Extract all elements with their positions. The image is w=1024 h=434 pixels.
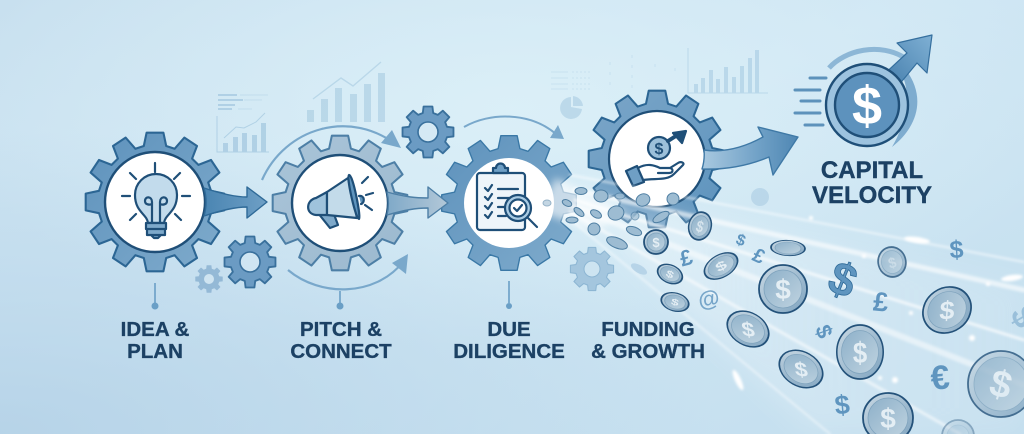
- large coins with dollar signs: $: [880, 403, 896, 434]
- label: pitch and connect: CONNECT: [290, 340, 392, 363]
- large coins with dollar signs: $: [985, 362, 1016, 408]
- gear: pitch and connect: [273, 136, 407, 270]
- large coins with dollar signs: $: [939, 295, 956, 325]
- gear: idea and plan: [86, 133, 224, 271]
- large coins with dollar signs: $: [713, 257, 730, 275]
- small flying coins: [543, 188, 679, 277]
- capital velocity icon: $: [852, 76, 882, 136]
- speed lines: [795, 78, 826, 125]
- connector: idea: [152, 283, 158, 310]
- floating currency symbols: $: [733, 231, 748, 250]
- arrow from funding gear: [702, 127, 798, 175]
- large coins with dollar signs: $: [793, 357, 809, 382]
- gear: due diligence: [442, 136, 576, 270]
- heading: capital velocity: VELOCITY: [812, 182, 932, 209]
- faded gear near funding: [570, 247, 614, 291]
- small gear upper: [403, 107, 453, 157]
- icon: clipboard with magnifier: [477, 164, 537, 230]
- floating currency symbols: @: [696, 284, 721, 313]
- floating currency symbols: €: [929, 358, 951, 398]
- floating currency symbols: £: [749, 244, 768, 269]
- label: idea and plan: PLAN: [127, 340, 183, 363]
- faint chart: small bars with list: [217, 95, 269, 152]
- arrow from pitch gear: [387, 187, 448, 218]
- heading: capital velocity: CAPITAL: [821, 157, 923, 184]
- large coins with dollar signs: $: [775, 274, 791, 305]
- label: due diligence: DILIGENCE: [453, 340, 565, 363]
- floating currency symbols: $: [833, 389, 851, 421]
- arc arrow over diligence gear: [464, 117, 564, 139]
- arrow from idea gear: [204, 187, 267, 218]
- floating currency symbols: $: [810, 321, 838, 341]
- large coins with dollar signs: $: [694, 218, 705, 237]
- large coins with dollar signs: $: [740, 317, 756, 342]
- arc arrow under pitch gear: [288, 254, 408, 289]
- floating currency symbols: $: [821, 250, 865, 308]
- label: funding and growth: FUNDING: [601, 318, 695, 341]
- small gear lower: [225, 237, 275, 287]
- floating currency symbols: $: [949, 236, 964, 264]
- capital velocity icon: [795, 35, 932, 147]
- large coins with dollar signs: $: [664, 268, 676, 281]
- large coins with dollar signs: $: [853, 336, 868, 369]
- label: due diligence: DUE: [487, 318, 531, 341]
- icon: hand holding coin: $: [655, 141, 664, 158]
- large coins with dollar signs: $: [887, 255, 898, 273]
- orbit arcs: [829, 49, 905, 68]
- label: funding and growth: & GROWTH: [591, 340, 705, 363]
- label: idea and plan: IDEA &: [121, 318, 190, 341]
- faint chart: rising bars: [307, 62, 385, 122]
- faint chart: right bars and table: [551, 48, 768, 119]
- floating currency symbols: £: [872, 286, 890, 318]
- dollar coin: [826, 64, 908, 146]
- connector: diligence: [506, 281, 512, 309]
- gear: funding and growth: [589, 91, 725, 227]
- floating currency symbols: £: [677, 244, 696, 271]
- arc arrow over pitch gear: [262, 126, 401, 180]
- rising arrow: [880, 35, 932, 92]
- connector: pitch: [336, 291, 344, 310]
- large coins with dollar signs: $: [670, 297, 680, 308]
- icon: megaphone: [308, 175, 373, 228]
- label: pitch and connect: PITCH &: [300, 318, 382, 341]
- faded gear small: [195, 265, 223, 293]
- light beam from gears to coins: [540, 175, 1024, 434]
- large coins with dollar signs: $: [652, 235, 660, 250]
- icon: light bulb: [122, 163, 190, 238]
- floating currency symbols: [677, 188, 1024, 421]
- large coins with dollar signs: [644, 210, 1024, 434]
